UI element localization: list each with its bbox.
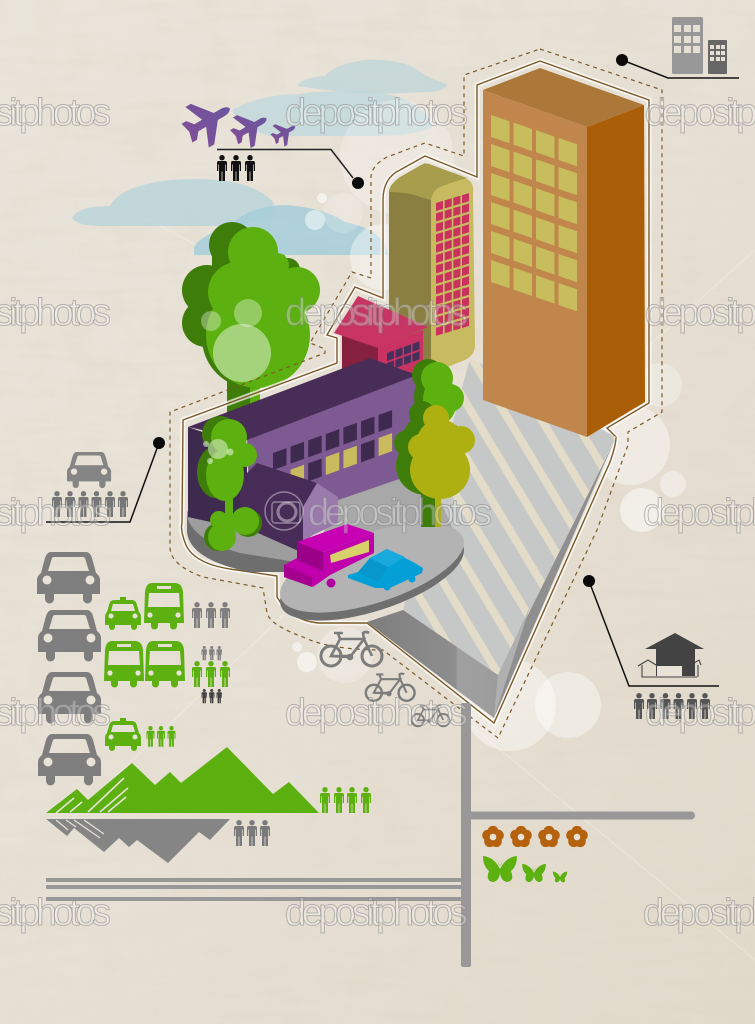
icons: green butterflies [483, 856, 567, 882]
map outline [170, 49, 662, 738]
icons: grey cars column [37, 552, 101, 786]
plaza front side [367, 610, 498, 718]
olive tower [389, 163, 475, 372]
red house [334, 296, 428, 395]
callout: house with people [583, 575, 719, 719]
callout: office buildings [616, 17, 739, 78]
tall orange tower [483, 68, 645, 437]
striped plaza [367, 358, 616, 718]
house windows [387, 341, 420, 371]
cloud: middle [194, 205, 388, 255]
main vertical and horizontal bars [46, 703, 695, 967]
icon: green mountains [46, 747, 319, 813]
watermarks: depositphotos [285, 92, 468, 134]
watermark camera logo [265, 492, 303, 530]
watermarks: depositphotos [308, 492, 492, 534]
big tree [182, 222, 320, 415]
cloud: behind planes [232, 91, 433, 136]
yellow windows [491, 115, 577, 311]
cloud: top [298, 60, 447, 94]
people: transport groups [146, 602, 230, 747]
icon: grey car [67, 452, 111, 488]
icons: green taxis and buses [104, 583, 185, 751]
people: green four [320, 787, 371, 813]
people: six grey [52, 491, 128, 517]
watermarks: depositphotos [285, 892, 468, 934]
people: six dark [634, 693, 710, 719]
people: grey three [234, 820, 270, 846]
watermarks: depositphotos [285, 292, 468, 334]
icon: office buildings [672, 17, 727, 74]
icon: house [638, 633, 704, 677]
building wing [240, 463, 317, 553]
icon: bicycles [321, 632, 449, 726]
left ground base [187, 495, 320, 572]
cloud: left [72, 179, 275, 226]
magenta truck [284, 524, 374, 588]
clouds [72, 60, 447, 255]
icon: three planes [175, 88, 301, 153]
blue car [348, 549, 423, 590]
icon: mountain reflection [46, 819, 230, 863]
bokeh light circles [292, 100, 686, 751]
purple building [188, 358, 417, 553]
green tree pair [394, 359, 475, 527]
watermarks: depositphotos [285, 692, 468, 734]
pink window grid [436, 193, 469, 336]
purple building windows [273, 410, 392, 494]
callout: planes leader [217, 150, 364, 189]
small tree with bushes [197, 416, 262, 551]
icons: brown flowers [482, 826, 588, 847]
people: black trio [217, 155, 255, 181]
plaza right side [494, 437, 616, 718]
callout: car with people [46, 437, 165, 522]
oval parking platform [270, 473, 474, 639]
truck window [330, 540, 369, 563]
